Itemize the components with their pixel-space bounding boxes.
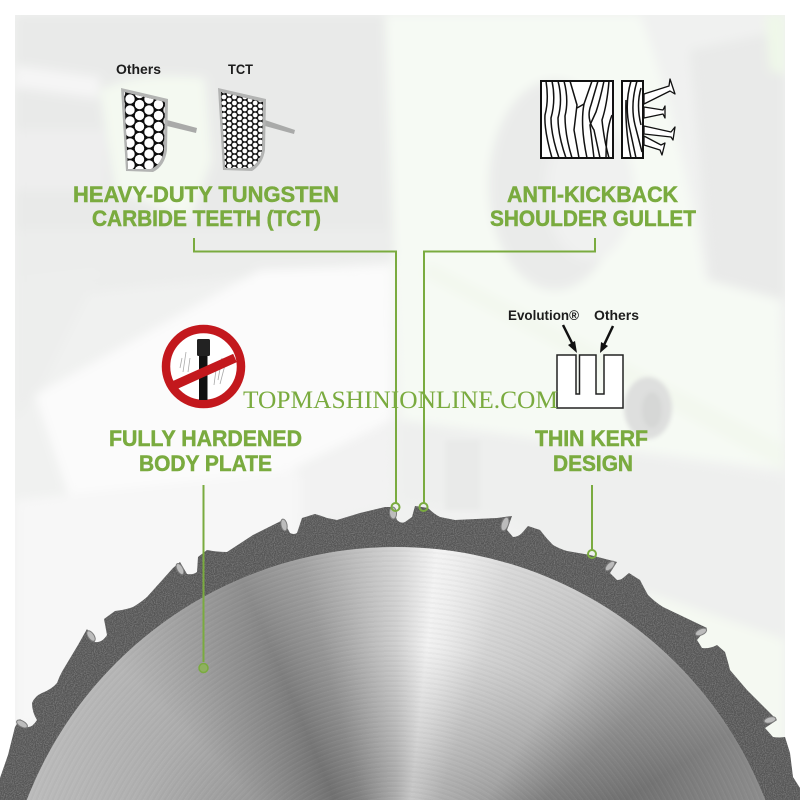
icon: no vibration sign [166, 329, 241, 404]
callout line: body plate [199, 485, 208, 672]
heading: heavy-duty tungsten carbide teeth [73, 182, 339, 231]
callout line: thin kerf [588, 485, 596, 558]
heading: thin kerf design [535, 426, 648, 476]
heading: thin kerf design: THIN KERF [535, 426, 648, 451]
feature graphics overlay [74, 64, 696, 674]
callout line: TCT teeth [194, 238, 400, 511]
label: TCT: TCT [228, 61, 253, 77]
label: evolution: Evolution® [508, 307, 580, 323]
callout line: shoulder gullet [420, 238, 595, 511]
icon: thin kerf diagram [508, 307, 639, 408]
carbide tooth tips [15, 507, 777, 730]
watermark: TOPMASHINIONLINE.COM [243, 387, 558, 414]
heading: fully hardened body plate: FULLY HARDENED [109, 426, 302, 451]
heading: anti-kickback shoulder gullet: SHOULDER GULLET [490, 206, 697, 231]
heading: heavy-duty tungsten carbide teeth: CARBIDE TEETH (TCT) [92, 206, 321, 231]
heading: fully hardened body plate: BODY PLATE [139, 451, 272, 476]
heading: anti-kickback shoulder gullet [490, 182, 697, 231]
heading: heavy-duty tungsten carbide teeth: HEAVY-DUTY TUNGSTEN [73, 182, 339, 207]
saw blade polished center disc [0, 547, 800, 800]
label: others kerf: Others [594, 307, 639, 323]
icon: wood grain and nails [541, 79, 675, 158]
icon: others tooth grain [116, 61, 197, 173]
label: others: Others [116, 61, 161, 77]
heading: fully hardened body plate [109, 426, 302, 476]
heading: anti-kickback shoulder gullet: ANTI-KICKBACK [507, 182, 678, 207]
heading: thin kerf design: DESIGN [553, 451, 633, 476]
icon: TCT tooth grain [218, 61, 295, 173]
